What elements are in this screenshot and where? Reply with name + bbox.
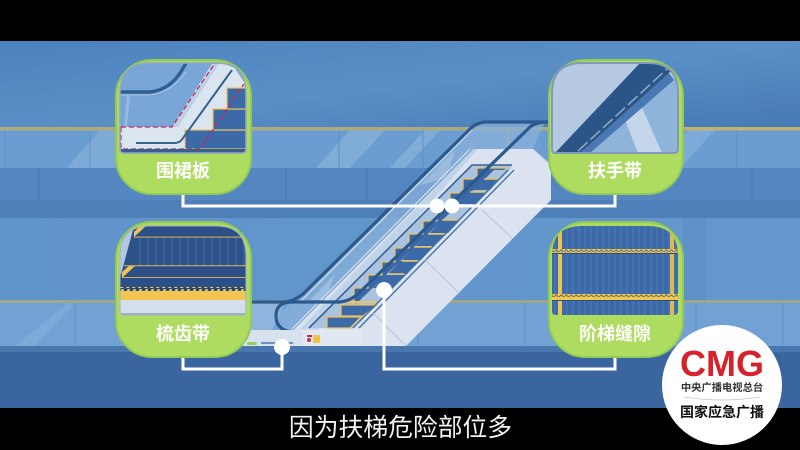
connector dots	[274, 198, 460, 355]
panel: 梳齿带	[116, 222, 251, 357]
panel: 阶梯缝隙	[549, 222, 683, 357]
connector lines	[183, 194, 615, 369]
escalator	[240, 122, 551, 346]
skirting rails	[353, 170, 514, 328]
panel: 扶手带	[549, 60, 683, 194]
glass balustrade between handrails	[275, 122, 545, 330]
stair risers above handrail	[354, 168, 507, 310]
subtitle: 因为扶梯危险部位多	[289, 414, 512, 442]
near handrail	[276, 122, 548, 332]
panel: 围裙板	[116, 60, 251, 194]
CMG logo badge: 中央广播电视总台	[681, 381, 763, 394]
label: 扶手带	[588, 161, 642, 181]
side panel seams	[373, 149, 551, 346]
far handrail	[250, 122, 547, 302]
label: 梳齿带	[156, 323, 210, 344]
lower flat steps	[341, 305, 377, 316]
CMG logo badge: 国家应急广播	[680, 404, 764, 420]
CMG logo badge: CMG	[680, 343, 764, 384]
CMG logo badge	[662, 325, 782, 445]
lower deck and controls	[240, 330, 362, 346]
escalator body side panel	[240, 149, 551, 346]
step treads below handrail	[325, 170, 508, 328]
inner wall of stair channel	[309, 165, 512, 328]
label: 围裙板	[156, 161, 210, 181]
label: 阶梯缝隙	[579, 323, 651, 344]
